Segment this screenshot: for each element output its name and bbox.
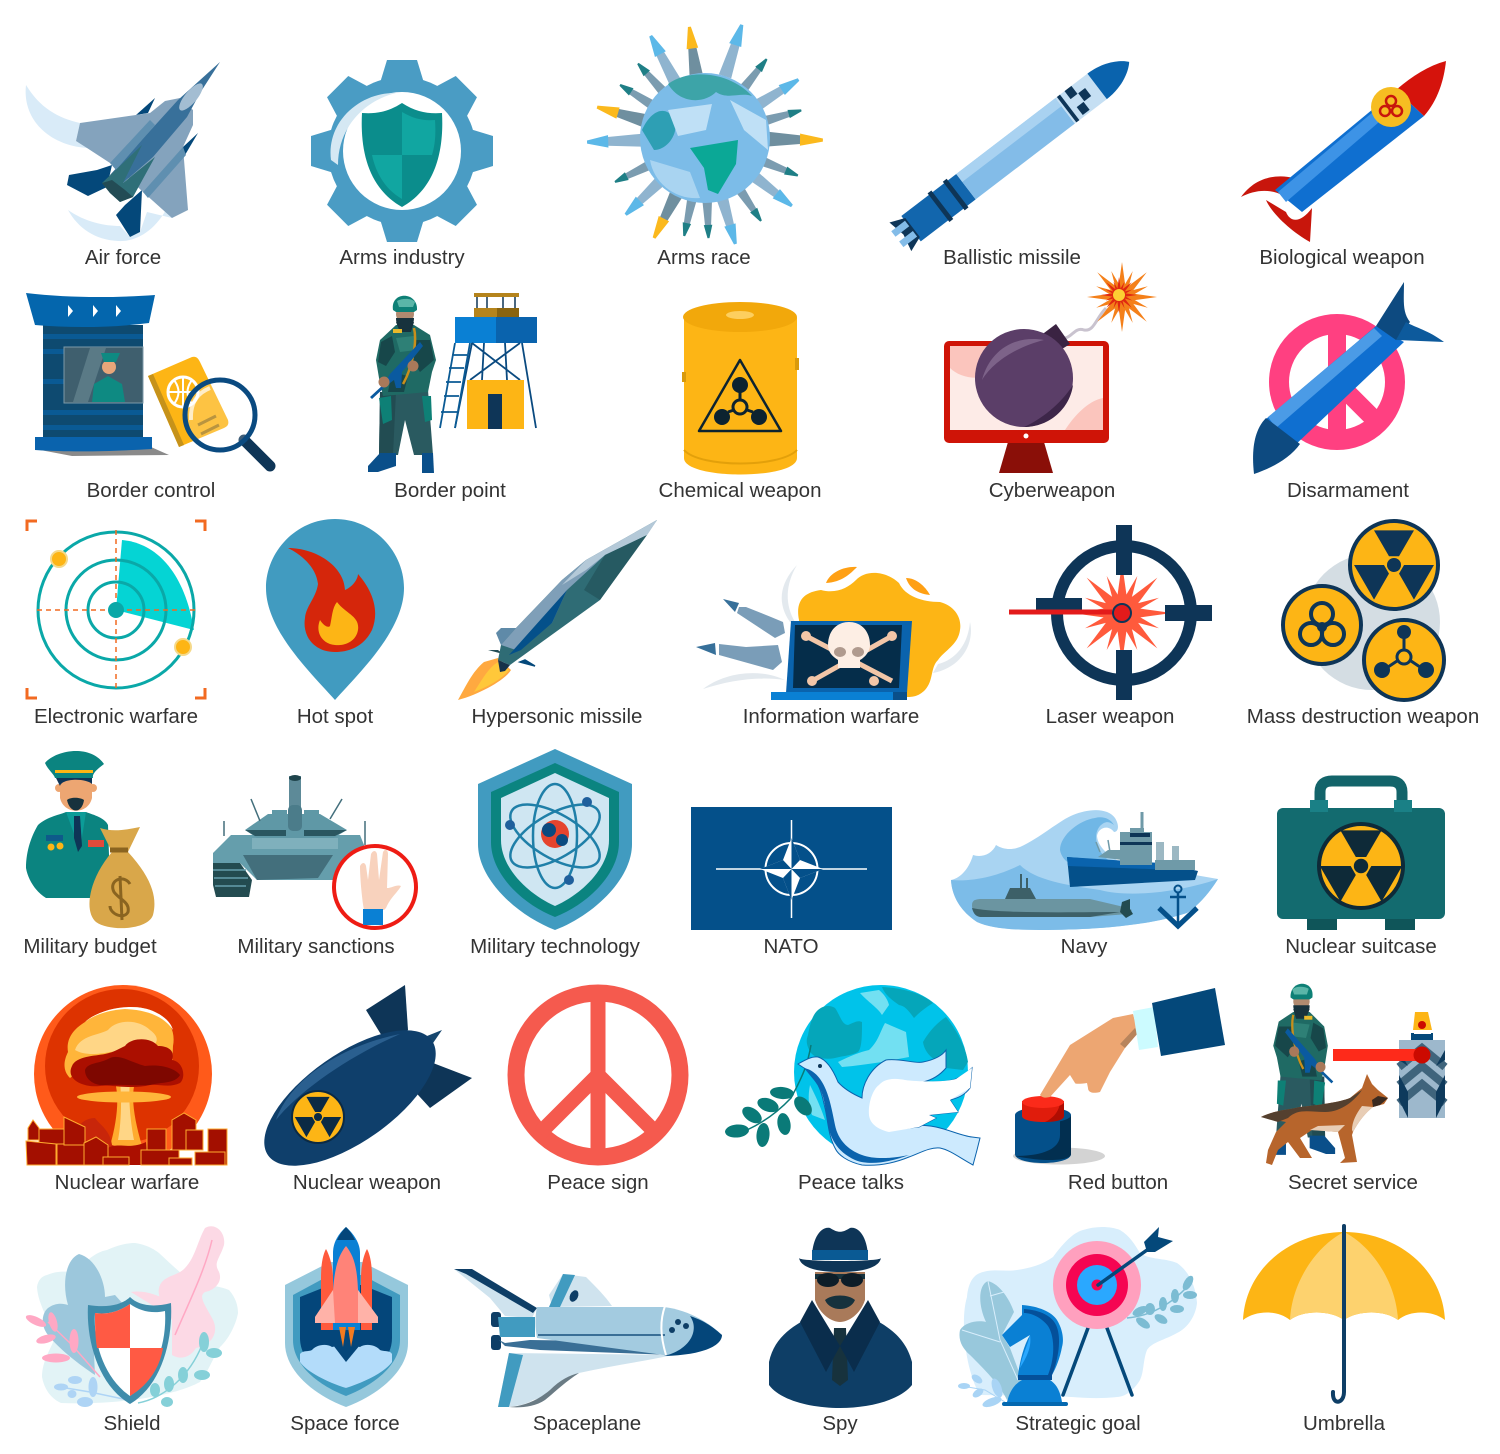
panel: secret service [1261, 984, 1445, 1194]
icon: explosion blob [703, 565, 971, 697]
icon: booth [26, 293, 169, 456]
panel: biological weapon [1241, 61, 1446, 269]
panel: spy [769, 1228, 912, 1435]
icon: rocket with biohazard [1241, 61, 1446, 242]
icon: submarine [972, 874, 1133, 918]
icon: laptop with skull [771, 621, 912, 700]
panel: arms race [587, 23, 823, 269]
label: Disarmament [1287, 479, 1409, 502]
icon: radar [27, 521, 205, 698]
icon: flame pin [266, 519, 404, 700]
panel: disarmament [1253, 282, 1444, 502]
icon: barrel [682, 302, 799, 474]
icon: olive branch [724, 1045, 815, 1148]
icon: missiles [696, 599, 785, 670]
label: Information warfare [743, 705, 919, 728]
label: NATO [763, 935, 819, 958]
panel: chemical weapon [659, 302, 821, 502]
icon: peace symbol [516, 990, 680, 1160]
panel: military technology [470, 749, 641, 958]
icon: shield [88, 1297, 171, 1404]
icon: money bag [89, 827, 154, 928]
icon: bomb [975, 262, 1157, 427]
panel: ballistic missile [886, 48, 1140, 269]
label: Ballistic missile [943, 246, 1081, 269]
panel: hot spot [266, 519, 404, 728]
panel: strategic goal [958, 1227, 1197, 1435]
icon: missile [886, 48, 1140, 253]
icon: anchor [1159, 886, 1197, 926]
label: Secret service [1288, 1171, 1418, 1194]
icon: bomb [243, 985, 472, 1191]
icon: dove [798, 1050, 980, 1165]
icon: monitor [944, 341, 1109, 473]
label: Military sanctions [237, 935, 395, 958]
label: Arms industry [339, 246, 465, 269]
icon: globe with missiles [587, 23, 823, 245]
label: Chemical weapon [659, 479, 821, 502]
panel: hypersonic missile [458, 520, 657, 728]
panel: nuclear suitcase [1277, 781, 1445, 958]
icon: watchtower [440, 293, 537, 429]
icon: badge [285, 1262, 408, 1407]
label: Laser weapon [1046, 705, 1174, 728]
icon: soldier [368, 296, 436, 473]
label: Military budget [23, 935, 157, 958]
icon: officer [26, 751, 110, 898]
icon: passport and magnifier [148, 357, 270, 466]
icon: waves [951, 810, 1218, 930]
label: Hot spot [297, 705, 373, 728]
icon: crosshair [1009, 525, 1212, 700]
panel: air force [26, 62, 220, 269]
icon: hand and sleeve [1040, 988, 1225, 1098]
icon: jet with crescents [26, 62, 220, 241]
icon: umbrella [1243, 1226, 1445, 1402]
icon: gear with shield [311, 60, 493, 242]
icon: soldier [1273, 984, 1335, 1155]
panel: military sanctions [213, 775, 416, 958]
label: Navy [1061, 935, 1108, 958]
label: Umbrella [1303, 1412, 1386, 1435]
label: Arms race [657, 246, 751, 269]
icon: hypersonic missile [458, 520, 657, 700]
label: Red button [1068, 1171, 1168, 1194]
panel: cyberweapon [944, 262, 1157, 502]
label: Hypersonic missile [472, 705, 642, 728]
icon: stop hand in red circle [334, 846, 416, 928]
label: Peace talks [798, 1171, 904, 1194]
panel: border control [26, 293, 270, 502]
panel: umbrella [1243, 1226, 1445, 1435]
panel: spaceplane [454, 1269, 722, 1435]
label: Peace sign [547, 1171, 649, 1194]
label: Border control [87, 479, 215, 502]
panel: military budget [23, 751, 157, 958]
icon: tank [213, 775, 368, 897]
panel: nuclear warfare [26, 985, 227, 1194]
icon: blob background [958, 1227, 1197, 1409]
panel: nuclear weapon [243, 985, 472, 1194]
icon: globe [794, 985, 968, 1159]
icon: sun disc [34, 985, 212, 1163]
icon: mushroom cloud [64, 1007, 183, 1146]
icon: target with arrow [1053, 1227, 1173, 1395]
panel: navy [951, 810, 1218, 958]
icon: shuttle [454, 1269, 722, 1407]
label: Electronic warfare [34, 705, 198, 728]
label: Shield [104, 1412, 160, 1435]
panel: arms industry [311, 60, 493, 269]
icon: dog [1261, 1074, 1388, 1165]
panel: NATO [691, 807, 892, 958]
icon: spy figure [769, 1228, 912, 1408]
label: Biological weapon [1259, 246, 1425, 269]
icon: atom shield [478, 749, 632, 930]
panel: border point [368, 293, 537, 502]
panel: peace talks [724, 985, 980, 1194]
icon: peace sign and missile [1253, 282, 1444, 474]
panel: laser weapon [1009, 525, 1212, 728]
label: Strategic goal [1015, 1412, 1141, 1435]
panel: red button [1013, 988, 1225, 1194]
icon: three hazard discs [1283, 521, 1444, 700]
panel: shield [24, 1226, 238, 1435]
icon: rocket [315, 1227, 378, 1362]
icon: warship [1067, 812, 1198, 887]
icon: city skyline [26, 1113, 227, 1165]
panel: mass destruction weapon [1247, 521, 1479, 728]
icon: chess knight [1002, 1305, 1068, 1406]
icon: barrier post [1333, 1012, 1445, 1118]
icon: suitcase [1277, 781, 1445, 930]
label: Cyberweapon [989, 479, 1115, 502]
label: Air force [85, 246, 161, 269]
panel: space force [285, 1227, 408, 1435]
label: Nuclear warfare [55, 1171, 199, 1194]
panel: electronic warfare [27, 521, 205, 728]
panel: information warfare [696, 565, 971, 728]
icon: foliage background [24, 1226, 238, 1407]
label: Space force [290, 1412, 400, 1435]
label: Spy [822, 1412, 858, 1435]
panel: peace sign [516, 990, 680, 1194]
icon: button [1013, 1096, 1105, 1164]
label: Spaceplane [533, 1412, 641, 1435]
label: Nuclear weapon [293, 1171, 441, 1194]
label: Military technology [470, 935, 641, 958]
label: Border point [394, 479, 506, 502]
label: Mass destruction weapon [1247, 705, 1479, 728]
label: Nuclear suitcase [1285, 935, 1437, 958]
icon: NATO flag [691, 807, 892, 930]
